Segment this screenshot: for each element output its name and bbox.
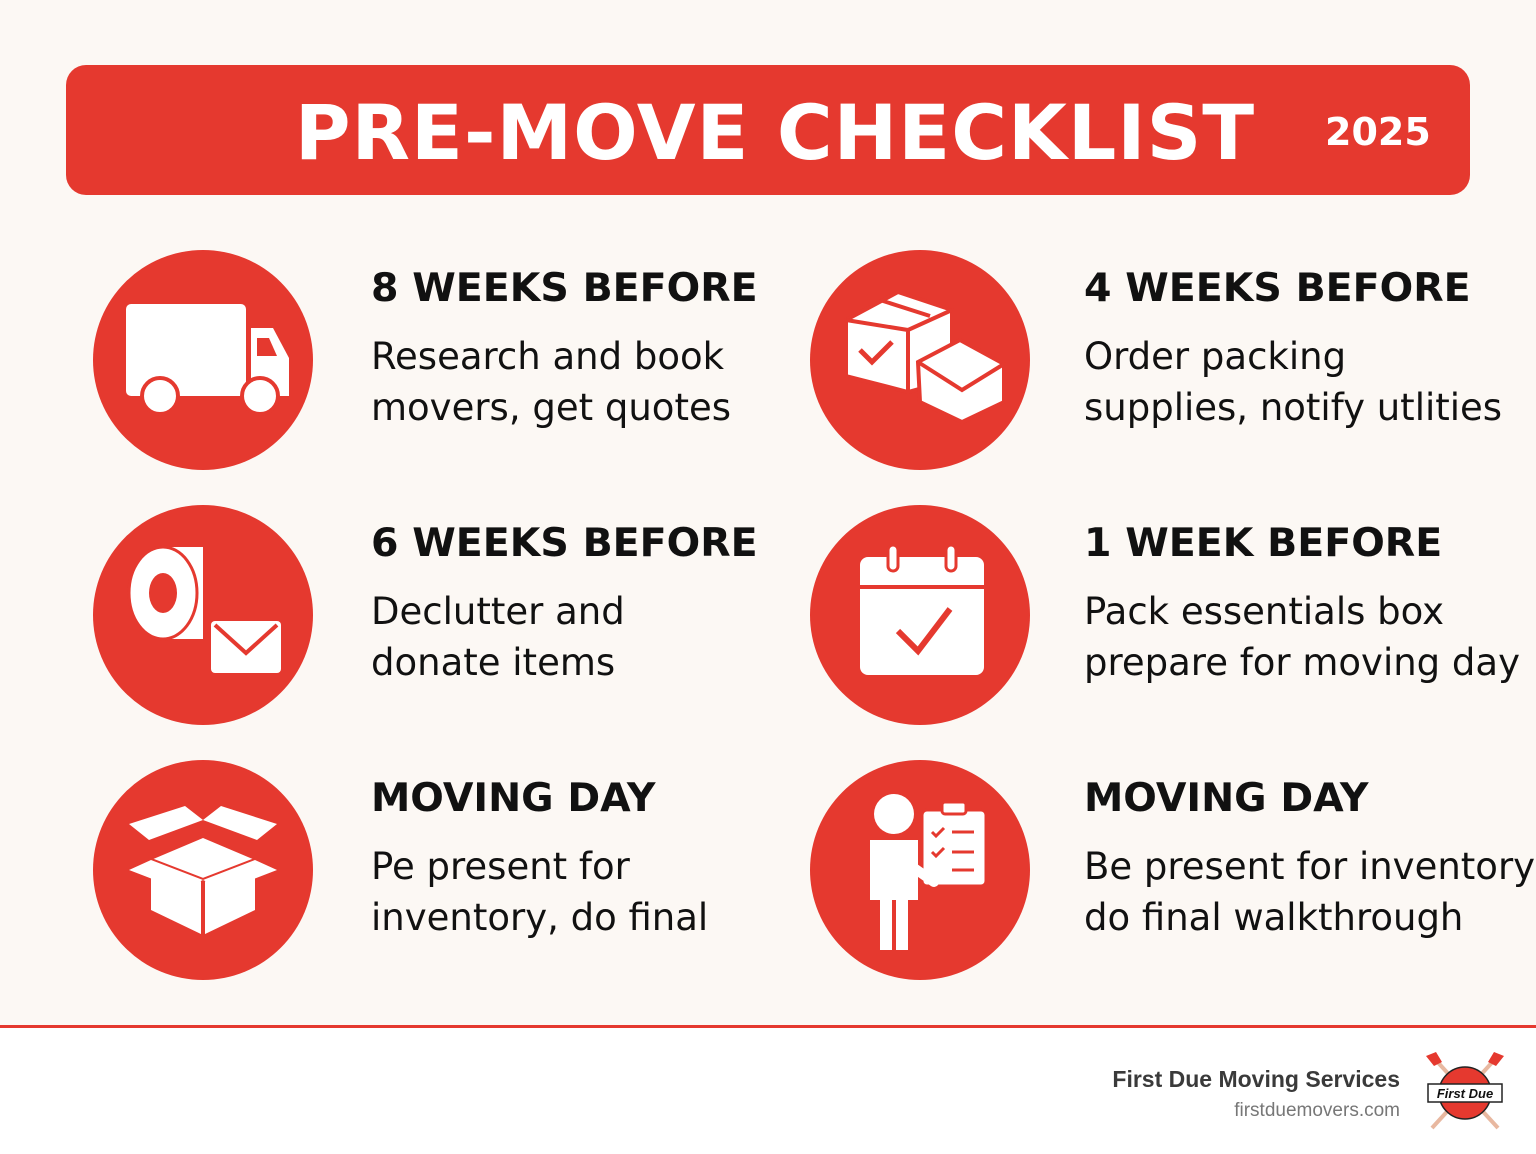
header banner: [66, 65, 1470, 195]
year: 2025: [1325, 110, 1431, 154]
icon: tape and envelope: [93, 505, 313, 725]
logo: [1426, 1052, 1504, 1130]
website: firstduemovers.com: [1234, 1100, 1400, 1121]
item: 6 weeks: 6 WEEKS BEFORE: [371, 520, 758, 566]
item: 1 week: Pack essentials box: [1084, 590, 1444, 633]
item: 1 week: 1 WEEK BEFORE: [1084, 520, 1442, 566]
item: 4 weeks: Order packing: [1084, 335, 1346, 378]
item: 1 week: [1084, 520, 1520, 684]
item: 6 weeks: [371, 520, 758, 684]
icon: calendar: [810, 505, 1030, 725]
item: 8 weeks: 8 WEEKS BEFORE: [371, 265, 758, 311]
item: 4 weeks: [1084, 265, 1502, 429]
footer: [0, 1025, 1536, 1154]
title: PRE-MOVE CHECKLIST: [295, 88, 1255, 177]
item: 8 weeks: movers, get quotes: [371, 386, 731, 429]
item: 1 week: prepare for moving day: [1084, 641, 1520, 684]
item: moving day left: [371, 775, 708, 939]
icon: open box: [93, 760, 313, 980]
item: 8 weeks: [371, 265, 758, 429]
item: moving day left: Pe present for: [371, 845, 630, 888]
item: 6 weeks: Declutter and: [371, 590, 625, 633]
item: 4 weeks: 4 WEEKS BEFORE: [1084, 265, 1471, 311]
icon: truck: [93, 250, 313, 470]
item: moving day right: MOVING DAY: [1084, 775, 1369, 821]
item: moving day left: MOVING DAY: [371, 775, 656, 821]
item: 8 weeks: Research and book: [371, 335, 724, 378]
item: 6 weeks: donate items: [371, 641, 615, 684]
item: moving day right: do final walkthrough: [1084, 896, 1463, 939]
icon: boxes: [810, 250, 1030, 470]
company name: First Due Moving Services: [1112, 1066, 1400, 1092]
icon: person with clipboard: [810, 760, 1030, 980]
item: 4 weeks: supplies, notify utlities: [1084, 386, 1502, 429]
logo: First Due: [1437, 1086, 1493, 1101]
item: moving day left: inventory, do final: [371, 896, 708, 939]
item: moving day right: [1084, 775, 1535, 939]
item: moving day right: Be present for inventory: [1084, 845, 1535, 888]
